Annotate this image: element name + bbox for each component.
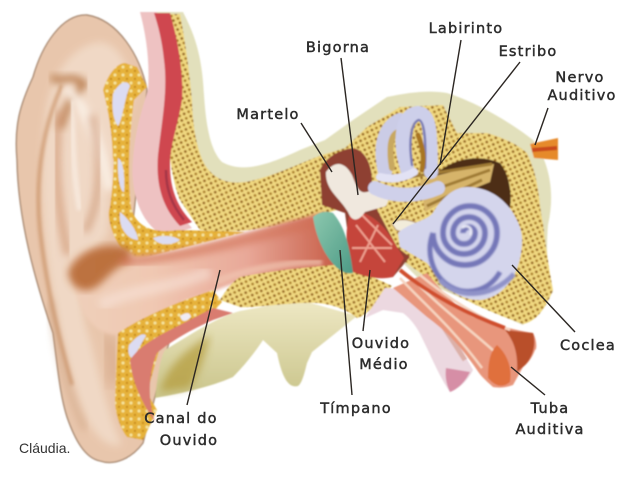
label: Bigorna: Bigorna: [306, 40, 370, 56]
label: Nervo Auditivo: Auditivo: [547, 88, 617, 104]
leader lines: [187, 40, 575, 405]
auditory nerve stub: [530, 138, 558, 160]
label: Martelo: Martelo: [236, 107, 300, 123]
eardrum (tympanic membrane): [313, 212, 353, 273]
label: Canal do Ouvido: Ouvido: [160, 433, 218, 449]
label: Nervo Auditivo: Nervo: [555, 70, 605, 86]
illustration: ear cross-section: [16, 12, 558, 462]
outer ear (pinna): [16, 15, 180, 462]
soft ear tissue below canal: [115, 290, 233, 440]
upper skull bone: [167, 14, 553, 324]
middle ear cavity: [320, 148, 410, 278]
cochlea spiral: [398, 187, 522, 300]
lower canal bone: [220, 264, 392, 318]
label: Tuba Auditiva: Auditiva: [515, 422, 585, 438]
semicircular canals (labyrinth): [375, 113, 438, 195]
cream skin layer above canal: [150, 12, 553, 325]
inner ear bony cavity and nerve: [410, 158, 511, 212]
label: Ouvido Médio: Médio: [359, 357, 409, 373]
lower cream tissue: [155, 300, 357, 398]
label: Tímpano: Tímpano: [319, 401, 392, 417]
label: Labirinto: Labirinto: [429, 21, 503, 37]
gold cartilage around upper canal: [103, 63, 245, 260]
ear canal: [68, 212, 342, 335]
label: Canal do Ouvido: Canal do: [144, 411, 218, 427]
label: Coclea: Coclea: [560, 338, 616, 354]
pink and red tissue strip: [132, 12, 192, 236]
ossicles: malleus, incus, stapes: [326, 164, 425, 233]
credit: Cláudia: Cláudia.: [19, 440, 70, 456]
auditory tube and throat muscles: [365, 270, 536, 392]
label: Ouvido Médio: Ouvido: [352, 336, 410, 352]
label: Tuba Auditiva: Tuba: [530, 401, 569, 417]
label: Estribo: Estribo: [499, 44, 557, 60]
